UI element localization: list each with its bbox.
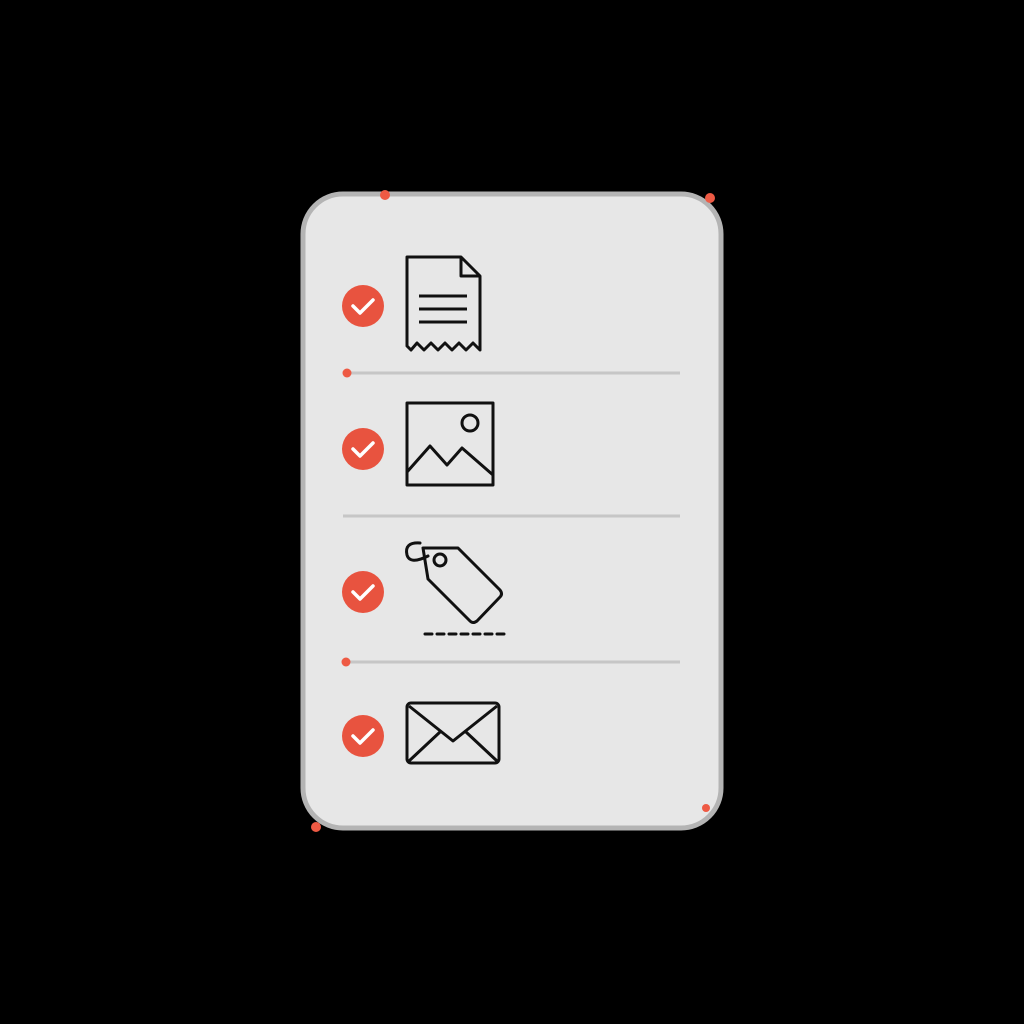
icon: receipt [407, 257, 480, 350]
icon: envelope [407, 703, 499, 763]
icon: image [407, 403, 493, 485]
panel: card [303, 194, 721, 828]
accent dots [311, 190, 715, 832]
icon: tag [407, 543, 506, 634]
check icons [342, 285, 384, 757]
